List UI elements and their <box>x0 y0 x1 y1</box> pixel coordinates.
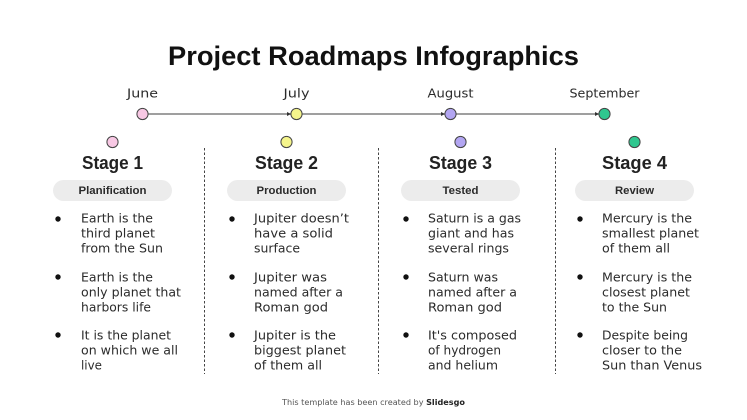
bullet list: of them all <box>254 358 322 372</box>
bullet list: Despite being <box>602 328 688 342</box>
panel: stage 2 <box>227 136 349 372</box>
bullet list: of hydrogen <box>428 342 501 358</box>
panel: stage 4 <box>575 136 702 372</box>
bullet list: and helium <box>428 358 498 372</box>
milestone: June <box>126 86 158 120</box>
bullet list: It is the planet <box>81 328 171 342</box>
heading: Stage 4: Stage 4 <box>602 153 667 173</box>
pill: Tested: Tested <box>442 185 478 197</box>
heading: Stage 1: Stage 1 <box>82 153 143 173</box>
arrow: to August <box>441 112 445 116</box>
arrow: to September <box>595 112 599 116</box>
bullet list: harbors life <box>81 300 151 314</box>
bullet list: Earth is the <box>81 210 153 226</box>
bullet list: third planet <box>81 226 155 240</box>
pill: Review: Review <box>615 185 654 197</box>
bullet list: closer to the <box>602 342 682 358</box>
milestone: July: July <box>282 86 310 100</box>
timeline <box>126 86 640 120</box>
bullet list: Saturn is a gas <box>428 210 521 226</box>
pill: Planification: Planification <box>78 185 147 197</box>
bullet list: from the Sun <box>81 240 163 256</box>
bullet list: Jupiter is the <box>253 328 336 342</box>
bullet list: closest planet <box>602 284 690 300</box>
arrow: to July <box>287 112 291 116</box>
bullet list: have a solid <box>254 226 333 240</box>
bullet list: surface <box>254 240 300 256</box>
milestone: September: September <box>570 86 640 100</box>
icon: pink dot <box>107 136 118 148</box>
bullet list <box>55 210 181 372</box>
bullet list: Earth is the <box>81 270 153 284</box>
bullet list: Jupiter was <box>253 270 327 284</box>
bullet list: live <box>81 358 102 372</box>
panel: stage 3 <box>401 136 521 372</box>
divider 3 <box>554 148 556 374</box>
bullet list: on which we all <box>81 342 178 358</box>
bullet list: smallest planet <box>602 226 699 240</box>
bullet list: giant and has <box>428 226 514 240</box>
bullet list: to the Sun <box>602 300 667 314</box>
bullet list: only planet that <box>81 284 181 300</box>
bullet list <box>577 210 702 372</box>
milestone: July <box>282 86 310 120</box>
bullet list: several rings <box>428 240 509 256</box>
pill: Tested <box>401 180 520 201</box>
bullet list: biggest planet <box>254 342 346 358</box>
pill: Planification <box>53 180 172 201</box>
bullet list: Jupiter doesn’t <box>253 210 349 226</box>
bullet list <box>229 210 349 372</box>
bullet list: Roman god <box>254 300 328 314</box>
bullet list: Saturn was <box>428 270 498 284</box>
milestone: September <box>570 86 640 120</box>
divider 2 <box>378 148 380 374</box>
milestone: August <box>428 86 474 120</box>
milestone: August: August <box>428 86 474 100</box>
milestone: June: June <box>126 86 158 100</box>
pill: Production <box>227 180 346 201</box>
bullet list: of them all <box>602 240 670 256</box>
bullet list: Mercury is the <box>602 210 692 226</box>
icon: yellow dot <box>281 136 292 148</box>
icon: purple dot <box>455 136 466 148</box>
bullet list: Sun than Venus <box>602 358 702 372</box>
icon: green dot <box>629 136 640 148</box>
bullet list: Roman god <box>428 300 502 314</box>
bullet list <box>403 210 521 372</box>
bullet list: named after a <box>254 284 343 300</box>
bullet list: Mercury is the <box>602 270 692 284</box>
heading: Stage 2: Stage 2 <box>255 153 318 173</box>
pill: Review <box>575 180 694 201</box>
footer credit: This template has been created by Slidesgo <box>281 398 466 407</box>
title: Project Roadmaps Infographics <box>168 41 579 71</box>
divider 1 <box>204 148 206 374</box>
heading: Stage 3: Stage 3 <box>429 153 492 173</box>
panel: stage 1 <box>53 136 181 372</box>
bullet list: named after a <box>428 284 517 300</box>
bullet list: It's composed <box>428 328 517 342</box>
pill: Production: Production <box>256 185 317 197</box>
